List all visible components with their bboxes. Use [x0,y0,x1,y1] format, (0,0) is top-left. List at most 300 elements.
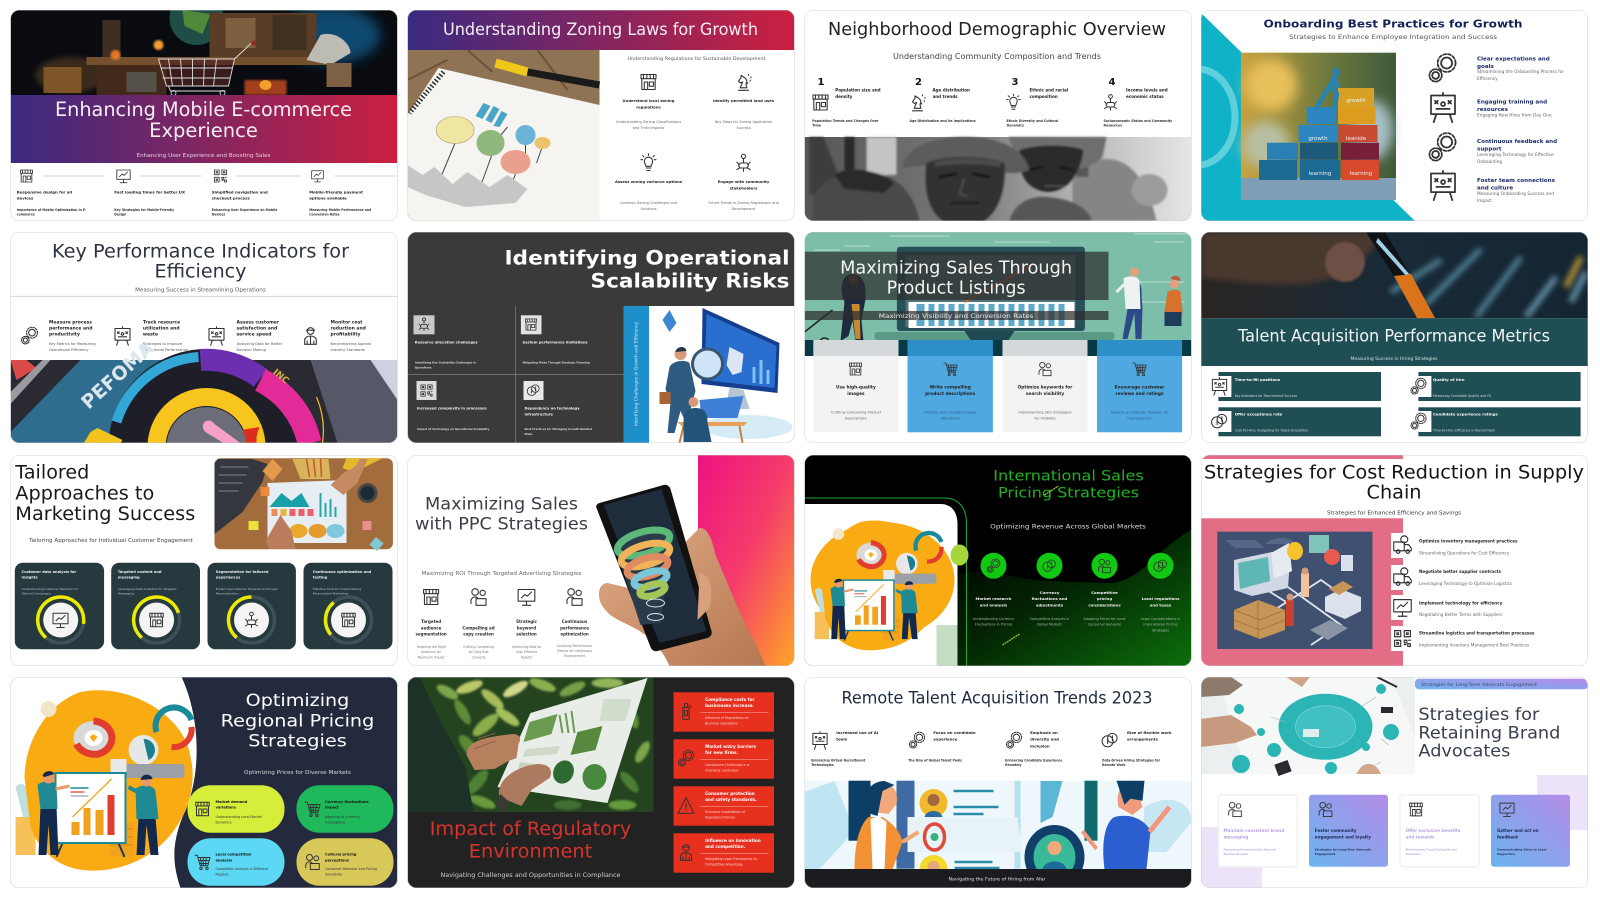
regulation cards: Influence on innovation [705,838,761,843]
metric cards: Measuring Candidate Quality and Fit [1433,394,1492,398]
strategy cards with progress rings: testing [313,576,328,580]
slide: Remote Talent Acquisition Trends 2023 [804,677,1192,889]
pricing steps: Adapting Prices for Local [1084,617,1125,621]
advocate cards: Maintaining Trust During Brand [1406,848,1457,852]
subtitle: Optimizing Revenue Across Global Markets [990,524,1146,530]
regulation cards: Regulatory Policies [705,816,736,820]
product cards: Analyzing Customer Reviews for [1110,410,1169,414]
pricing steps: Market research [976,596,1011,601]
metric cards: Time-to-Hire: Efficiency in Recruitment [1432,428,1496,432]
photo: sketch notebook [408,50,600,221]
subtitle: Strategies to Enhance Employee Integration and Success [1289,33,1498,41]
advocate cards [1218,795,1570,867]
strategy cards with progress rings: Targeted content and [118,570,161,574]
pricing pills: Regions [216,872,229,876]
zoning grid: and Their Impacts [633,126,664,130]
KPI items: Operational Efficiency [49,348,89,352]
eyebrow pill [1415,679,1588,689]
title: Impact of Regulatory [430,819,631,840]
pricing steps: Local regulations [1142,596,1179,601]
title: Environment [469,842,592,863]
slide: Strategies for Cost Reduction in Supply Chain [1201,455,1588,666]
timeline items: Conversion Rates [309,213,340,217]
pricing pills: Adapting to Currency [325,815,360,819]
cost reduction list: Negotiate better supplier contracts [1419,569,1502,574]
advocate cards: Foster community [1315,828,1356,833]
pricing pills: Fluctuations [325,820,345,824]
numbered items: Ethnic Diversity and Cultural [1006,119,1058,123]
advocate cards: and rewards [1406,835,1435,840]
title [430,819,631,863]
pricing steps: Currency [1040,590,1059,595]
title band: Experience [149,119,258,142]
title: Neighborhood Demographic Overview [828,19,1166,40]
regulation cards: and competition. [705,844,746,849]
onboarding list: resources [1477,107,1509,113]
risk grid: Impact of Technology on Operational Scalability [417,427,490,431]
numbered items: Socioeconomic Status and Community [1104,119,1172,123]
KPI items [22,320,372,352]
title: Optimizing [246,691,349,711]
lavender decoration [1201,775,1588,888]
timeline items: commerce [17,213,35,217]
trend items: experience [933,737,958,742]
regulation cards: Consumer protection [705,791,755,796]
onboarding list: Continuous feedback and [1477,139,1557,145]
product cards: images [847,391,865,397]
risk grid: Best Practices for Managing Growth-Related [524,427,592,431]
pricing steps: and taxes [1150,602,1172,607]
timeline items: Mobile-friendly payment [309,190,363,194]
decorative squiggles [1002,486,1058,645]
blue vertical bar: Identifying Challenges in Growth and Efficiency [634,322,640,426]
trend items: Remote Work [1102,763,1126,767]
subtitle overlay [804,311,1108,320]
trend items: Embracing Virtual Recruitment [811,758,865,762]
PPC items: audience [421,625,442,630]
numbered items [812,77,1173,128]
onboarding list: Efficiency [1477,76,1498,82]
product cards: Optimize keywords for [1018,385,1072,390]
PPC items: Targeted [421,619,441,624]
PPC items: Analyzing Performance [557,644,592,648]
PPC items: selection [516,632,537,637]
PPC items: keyword [517,625,536,630]
advocate cards: Market Growth [1224,852,1248,856]
pricing steps: pricing [1097,596,1112,601]
product cards: Effectively [941,416,960,420]
risk grid: Identifying Key Scalability Challenges in [415,360,476,364]
onboarding list: Engaging training and [1477,100,1547,106]
KPI items: satisfaction and [236,325,277,331]
product cards: Crafting Compelling Product [831,410,881,414]
risk grid: Increased complexity in processes [417,406,487,410]
photo: desk with charts [214,458,393,551]
regulation cards [674,692,774,873]
subtitle: Tailoring Approaches for Individual Customer Engagement [28,538,193,544]
trend items: Rise of flexible work [1127,730,1172,735]
PPC items: Metrics for Continuous [557,649,592,653]
metric cards: Cost-Per-Hire: Budgeting for Talent Acquisition [1235,428,1308,432]
slide: Understanding Zoning Laws for Growth [408,10,794,221]
numbered items: Income levels and [1126,88,1168,92]
photo: person holding plant chart [408,676,654,812]
strategy cards with progress rings: insights [22,576,38,580]
cost reduction list: Implementing Inventory Management Best Practices [1419,642,1529,648]
slide: Tailored Approaches to Marketing Success [10,455,398,666]
KPI items: utilization and [143,325,180,331]
onboarding list: Impact [1477,198,1492,204]
pricing steps [973,553,1180,632]
slide: Key Performance Indicators for Efficiency [10,232,398,443]
slide: Talent Acquisition Performance Metrics [1201,232,1588,443]
pricing pills: variations [216,806,236,810]
KPI items: Track resource [143,320,180,326]
pricing steps: Understanding Currency [973,617,1014,621]
cost reduction list: Implement technology for efficiency [1419,600,1503,606]
green gradient shape [954,530,1192,666]
slide: Identifying Operational Scalability Risks [408,232,794,443]
onboarding list: Streamlining the Onboarding Process for [1477,70,1564,75]
zoning grid: Engage with community [718,179,769,184]
slide: Optimizing Regional Pricing Strategies [10,677,398,888]
title [1204,461,1584,503]
numbered items: Age distribution [932,88,970,92]
photo: monochrome portraits [804,137,1192,223]
KPI items: productivity [49,331,80,337]
title overlay [804,252,1108,300]
subtitle: Strategies for Enhanced Efficiency and Savings [1327,510,1462,516]
onboarding list: Clear expectations and [1477,56,1550,62]
slide: International Sales Pricing Strategies [804,455,1192,666]
zoning grid: Understanding Zoning Classifications [616,120,681,124]
metric cards [1212,372,1581,436]
onboarding list: Foster team connections [1477,178,1555,184]
photo: hand holding phone with funnel [596,485,766,666]
advocate cards: Offer exclusive benefits [1406,828,1460,833]
gauge image [10,343,398,443]
slide: Impact of Regulatory Environment [408,676,794,888]
slide: Maximizing Sales with PPC Strategies [408,455,794,666]
strategy cards with progress rings: Messaging [118,591,134,595]
regulation cards: businesses increase. [705,703,755,708]
pricing steps: Consumer Behavior [1088,623,1122,627]
zoning grid: Key Steps for Zoning Application [715,120,772,124]
title band: Enhancing Mobile E-commerce [55,98,352,121]
pricing pills: Dynamics [216,820,232,824]
zoning grid: Identify permitted land uses [713,98,775,103]
strategy cards with progress rings: Personalized Marketing [313,591,348,595]
risk grid: Mitigating Risks Through Strategic Planning [522,360,590,364]
KPI items: Key Metrics for Measuring [49,342,96,346]
advocate cards: Evolution [1406,852,1421,856]
zoning grid: Future Trends in Zoning Regulations and [708,201,779,205]
title [221,691,374,752]
regulation cards: Navigating Legal Frameworks for [705,857,758,861]
product cards: for Visibility [1034,416,1056,420]
strategy cards with progress rings: Leveraging Data Analytics for Targeted [118,587,176,591]
title overlay: Product Listings [887,278,1026,298]
risk grid: Resource allocation challenges [415,340,478,344]
title band [10,95,398,163]
risk grid: System performance limitations [522,340,588,344]
PPC items: Maximum Impact [418,655,445,659]
title: Efficiency [154,262,247,283]
regulation cards: Influence of Regulations on [705,716,749,720]
advocate cards: messaging [1224,835,1248,840]
onboarding list: Measuring Onboarding Success and [1477,192,1554,197]
PPC items [415,589,592,659]
PPC items: Crafting Compelling [463,645,494,649]
blue vertical bar [624,306,649,443]
PPC items: Improvement [564,654,586,658]
strategy cards with progress rings [15,563,393,652]
footer bar: Navigating the Future of Hiring from Afar [948,876,1046,882]
pricing pills: impact [325,806,339,810]
timeline items: Importance of Mobile Optimization in E- [17,208,86,212]
pricing pills: analysis [216,858,232,862]
advocate cards: Engagement [1315,852,1336,856]
pricing pills: Local competition [216,853,252,857]
slide: Neighborhood Demographic Overview [804,10,1192,223]
title: Maximizing Sales [425,494,578,513]
trend items: Focus on candidate [933,730,976,735]
timeline items: options available [309,196,347,200]
title [14,462,195,525]
onboarding list: Engaging New Hires from Day One [1477,112,1552,118]
timeline items: Devices [212,213,225,217]
risk grid: infrastructure [524,412,553,416]
KPI items: waste [143,331,158,337]
trend items: Emphasis on [1030,730,1058,735]
trend items: Technologies [811,763,834,767]
title: Approaches to [15,483,154,504]
numbered items: 4 [1108,77,1116,88]
slide: Onboarding Best Practices for Growth [1161,10,1588,221]
PPC items: copy creation [463,632,494,637]
metric cards: Offer acceptance rate [1235,412,1283,416]
strategy cards with progress rings: Enhancing Customer Experience through [216,587,277,591]
cost reduction list: Streamline logistics and transportation processes [1419,630,1535,636]
strategy cards with progress rings: experiences [216,576,240,580]
title: Strategies for Cost Reduction in Supply [1204,461,1584,483]
title: Remote Talent Acquisition Trends 2023 [842,688,1152,707]
photo: growth blocks: learning [1350,171,1372,177]
title: Onboarding Best Practices for Growth [1264,18,1522,30]
pricing steps: and analysis [980,602,1008,607]
timeline items: Measuring Mobile Performance and [309,208,371,212]
KPI items: performance and [49,325,92,331]
regulation cards: and safety standards. [705,797,757,802]
KPI items: service speed [236,331,271,337]
regulation cards: Competitive Advantage [705,863,743,867]
pricing steps: considerations [1088,602,1121,607]
zoning subtitle: Understanding Regulations for Sustainable Development [628,56,766,62]
KPI items: reduction and [330,325,366,331]
subtitle: Optimizing Prices for Diverse Markets [244,770,351,776]
cost reduction list [1394,536,1535,648]
timeline items: Design [114,213,126,217]
onboarding list: support [1477,147,1502,153]
PPC items: Compelling ad [462,625,495,630]
subtitle: Navigating Challenges and Opportunities in Compliance [440,872,621,879]
strategy cards with progress rings: Segmentation for tailored [216,570,268,574]
PPC items: Optimizing Bids for [512,645,541,649]
subtitle: Maximizing ROI Through Targeted Advertising Strategies [422,571,582,577]
onboarding list: and culture [1477,185,1513,191]
numbered items: density [835,94,853,99]
title [415,494,588,533]
teal diagonal shape [1201,14,1415,221]
KPI items: profitability [330,331,361,337]
pricing steps: Competitive [1091,590,1118,595]
advocate cards: Maintain consistent brand [1224,828,1284,833]
product cards: Use high-quality [836,385,876,390]
title: with PPC Strategies [415,514,588,533]
product cards [813,340,1182,432]
cost reduction list: Negotiating Better Terms with Suppliers [1419,612,1502,617]
photo: growth blocks: leanide [1346,136,1367,142]
timeline items [17,170,398,217]
product cards: Encourage customer [1115,385,1164,390]
timeline items: Key Strategies for Mobile-Friendly [114,208,174,212]
metric cards: Time-to-fill positions [1235,377,1281,382]
cost reduction list: Streamlining Operations for Cost Efficiency [1419,550,1510,556]
pricing steps: Competitive Analysis in [1030,617,1069,621]
metric cards: Key Indicators for Recruitment Success [1235,394,1297,398]
title: Marketing Success [15,504,195,525]
numbered items: 2 [915,77,922,88]
strategy cards with progress rings: messaging [118,576,140,580]
trend items: Enhancing Candidate Experience [1005,758,1062,762]
PPC items: Converts [472,655,486,659]
title band: Talent Acquisition Performance Metrics [1237,327,1550,346]
title overlay: Maximizing Sales Through [840,258,1072,278]
title: International Sales [993,469,1144,485]
illustration background [804,232,1192,356]
photo: growth blocks: growth [1308,136,1328,142]
numbered items: composition [1030,94,1058,99]
metric cards: Candidate experience ratings [1433,412,1498,416]
advocate cards: engagement and loyalty [1315,835,1371,840]
product cards: search visibility [1026,391,1064,397]
title: Pricing Strategies [998,486,1139,502]
PPC items: optimization [560,632,589,637]
trend items: arrangements [1127,737,1159,742]
product cards: Utilizing High-Quality Images [924,410,976,414]
risk grid: Risks [524,432,533,436]
title [993,469,1144,502]
pricing steps: fluctuations and [1032,596,1068,601]
icon tabs [1391,533,1405,651]
advocate cards: Nurturing Relationships Beyond [1224,848,1276,852]
title [52,241,349,283]
PPC items: Audience for [421,650,442,654]
pricing steps: Legal Considerations in [1141,617,1180,621]
trend items: tools [836,737,848,742]
regulation cards: Economic Implications of [705,810,745,814]
PPC items: Targeting the Right [416,645,446,649]
strategy cards with progress rings: Customer data analysis for [22,570,76,574]
trend items: Increased use of AI [836,730,878,735]
product cards: reviews and ratings [1115,391,1164,397]
risk grid [408,306,624,443]
zoning grid: Common Zoning Challenges and [620,201,677,205]
pricing pills: Market demand [216,800,247,804]
title: Retaining Brand [1418,723,1560,743]
photo: growth blocks: growth [1346,98,1366,104]
advocate cards: Communicating Value to Loyal [1497,848,1546,852]
pricing steps: Strategies [1152,628,1169,632]
PPC items: Cost-Effective [516,650,537,654]
title band [1201,318,1588,366]
strategy cards with progress rings: Effective Tools for Implementing [313,587,361,591]
regulation cards: Compliance costs for [705,697,754,702]
header band [408,10,794,50]
photo: planning diagram [1201,677,1415,776]
title [506,250,788,292]
numbered items: Ethnic and racial [1030,88,1068,92]
gauge image: PEFOMA [77,337,159,414]
numbered items: 3 [1012,77,1018,88]
cost reduction list: Optimize inventory management practices [1419,538,1518,544]
photo: growth blocks: learning [1309,171,1331,177]
eyebrow pill: Strategies for Long-Term Advocate Engagement [1421,682,1537,688]
metric cards: Quality of hire [1433,377,1465,382]
pricing pills [188,785,394,886]
numbered items: Time [812,124,821,128]
gradient panel [698,455,794,666]
slide: Enhancing Mobile E-commerce Experience [10,0,398,221]
pricing pills: Cultural pricing [325,853,356,857]
title: Advocates [1418,742,1511,762]
title band: Enhancing User Experience and Boosting Sales [136,153,271,159]
product cards: Improvement [1127,416,1152,420]
timeline items: devices [17,196,34,200]
header band: Understanding Zoning Laws for Growth [443,20,758,39]
regulation cards: Compliance Challenges in a [705,763,749,767]
subtitle overlay: Maximizing Visibility and Conversion Rates [879,314,1033,320]
KPI items: Decision Making [236,348,266,352]
timeline items: checkout process [212,196,250,200]
strategy cards with progress rings: Understanding Customer Behavior for [22,587,78,591]
risk grid: Dependency on technology [524,406,580,410]
KPI items: Benchmarking Against [330,342,371,346]
pricing pills: Understanding Local Market [216,815,262,819]
timeline items: Fast loading times for better UX [114,190,185,194]
timeline items: Enhancing User Experience on Mobile [212,208,277,212]
trend items: Remotely [1005,763,1022,767]
numbered items: Resources [1104,124,1122,128]
PPC items: Ad Copy that [468,650,489,654]
strategy cards with progress rings: Continuous optimization and [313,570,371,574]
title: Scalability Risks [590,270,790,293]
strategy cards with progress rings: Tailored Campaigns [20,591,51,595]
title: Tailored [14,462,89,483]
illustration: remote hiring [804,781,1192,889]
photo: pen over chart [1201,232,1588,318]
zoning grid [615,74,779,211]
trend items: inclusion [1030,743,1050,748]
regulation cards: Market entry barriers [705,744,756,749]
illustration panel [804,498,968,666]
white illustration panel [10,677,197,888]
PPC items: Strategic [516,619,537,624]
product cards: Descriptions [845,416,867,420]
pricing pills: perceptions [325,858,349,862]
advocate cards: Supporters [1497,852,1515,856]
strategy cards with progress rings: Personalization [216,591,239,595]
